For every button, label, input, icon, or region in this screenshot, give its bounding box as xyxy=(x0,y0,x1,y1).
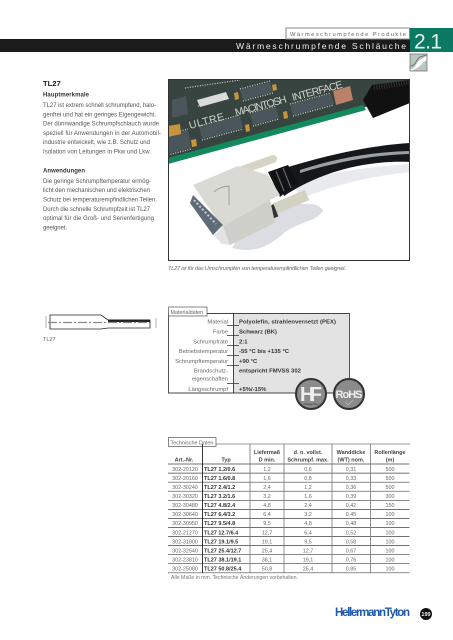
row 12 xyxy=(172,566,394,572)
product photo xyxy=(168,79,410,261)
row 3: 0,36 xyxy=(346,485,356,491)
row 10: 25,4 xyxy=(262,548,272,554)
row 2: 0,33 xyxy=(346,476,356,482)
row 5: 0,42 xyxy=(346,503,356,509)
shrink tube diagram xyxy=(46,315,156,329)
panel: Materialdaten: +5%/-15% xyxy=(239,387,267,393)
row 6: 302-30640 xyxy=(172,512,198,518)
row 11: 302-23810 xyxy=(172,557,198,563)
row 7: 302-30950 xyxy=(172,521,198,527)
row 2 xyxy=(172,476,394,482)
column headers: d. n. vollst. xyxy=(294,450,323,456)
column headers: (WT) nom. xyxy=(338,458,365,464)
row 5 xyxy=(172,503,394,509)
panel: Materialdaten: Brandschutz- xyxy=(194,369,228,375)
row 1: 302-20120 xyxy=(172,467,198,473)
row 10: 100 xyxy=(386,548,394,554)
text block: Hauptmerkmale: industrie entwickelt, wie z.B. Schutz und xyxy=(43,140,150,146)
row 4 xyxy=(172,494,394,500)
row 11: TL27 38.1/19.1 xyxy=(204,557,241,563)
row 2: 1,6 xyxy=(263,476,271,482)
row 11 xyxy=(172,557,394,563)
text block: Hauptmerkmale: TL27 ist extrem schnell schrumpfend, halo- xyxy=(43,103,156,109)
row 1 xyxy=(172,467,394,473)
row 7: 9,5 xyxy=(263,521,271,527)
row 9: TL27 19.1/9.5 xyxy=(204,539,238,545)
row 8: 6,4 xyxy=(304,530,312,536)
row 6: 3,2 xyxy=(304,512,312,518)
row 12: TL27 50.8/25.4 xyxy=(204,566,242,572)
logo: HellermannTyton: HellermannTyton xyxy=(335,607,410,619)
panel: Materialdaten: entspricht FMVSS 302 xyxy=(239,369,302,375)
product heading: TL27 xyxy=(43,79,61,88)
tab label: Materialdaten xyxy=(170,310,203,316)
row 5: 2,4 xyxy=(304,503,312,509)
panel: Materialdaten: Material xyxy=(207,320,228,326)
row 1: 1,2 xyxy=(263,467,271,473)
photo caption: TL27 ist für das Umschrumpfen von temperaturempfindlichen Teilen geeignet. xyxy=(168,266,346,272)
row 3: 2,4 xyxy=(263,485,271,491)
panel: Materialdaten: eigenschaften xyxy=(192,376,228,382)
text block: Hauptmerkmale: Hauptmerkmale xyxy=(43,92,90,98)
row 2: 0,8 xyxy=(304,476,312,482)
table footnote: Alle Maße in mm. Technische Änderungen vorbehalten. xyxy=(171,574,298,581)
row 5: 302-30480 xyxy=(172,503,198,509)
column headers: Liefermaß xyxy=(254,450,281,456)
text block: Anwendungen: licht den mechanischen und elektrischen xyxy=(43,188,150,194)
row 8 xyxy=(172,530,394,536)
text block: Hauptmerkmale: genfrei und hat ein geringes Eigengewicht. xyxy=(43,112,156,118)
metal plug xyxy=(190,195,223,235)
row 6: 0,45 xyxy=(346,512,356,518)
technical data table xyxy=(168,438,410,573)
row 12: 100 xyxy=(386,566,394,572)
row 2: TL27 1.6/0.8 xyxy=(204,476,235,482)
text block: Hauptmerkmale: Der dünnwandige Schrumpfschlauch wurde xyxy=(43,122,160,128)
column headers: Typ xyxy=(221,458,231,464)
row 6 xyxy=(172,512,394,518)
text block: Anwendungen: optimal für die Groß- und Serienfertigung xyxy=(43,216,154,222)
row 4: TL27 3.2/1.6 xyxy=(204,494,235,500)
panel: Materialdaten xyxy=(168,307,350,393)
icon: shrink tube xyxy=(410,54,427,71)
strain relief xyxy=(268,165,298,197)
header band xyxy=(0,28,410,52)
row 6: 100 xyxy=(386,512,394,518)
row 6: TL27 6.4/3.2 xyxy=(204,512,235,518)
row 9: 100 xyxy=(386,539,394,545)
board lettering: ULTRE xyxy=(188,111,226,132)
circuit board xyxy=(168,79,410,164)
row 10: 302-32540 xyxy=(172,548,198,554)
text block: Anwendungen xyxy=(43,168,157,231)
badge: halogen free xyxy=(296,379,337,409)
panel: Materialdaten: -55 °C bis +135 °C xyxy=(239,349,290,355)
row 10: 0,67 xyxy=(346,548,356,554)
row 3 xyxy=(172,485,394,491)
row 12: 50,8 xyxy=(262,566,272,572)
row 11: 19,1 xyxy=(303,557,313,563)
row 3: 1,2 xyxy=(304,485,312,491)
text block: Hauptmerkmale: speziell für Anwendungen in der Automobil- xyxy=(43,131,161,137)
badge: halogen free: halogenfrei xyxy=(304,402,319,406)
row 5: TL27 4.8/2.4 xyxy=(204,503,236,509)
row 8: 100 xyxy=(386,530,394,536)
row 7: 100 xyxy=(386,521,394,527)
header subtitle: Wärmeschrumpfende Produkte xyxy=(290,32,406,38)
row 4: 300 xyxy=(386,494,394,500)
row 12: 0,85 xyxy=(346,566,356,572)
circuit board: MACINTOSH xyxy=(234,94,288,119)
connector shadow xyxy=(232,204,323,250)
row 8: 0,52 xyxy=(346,530,356,536)
column headers: D min. xyxy=(259,458,276,464)
panel: Materialdaten: +90 °C xyxy=(239,359,258,365)
section number tab: 2.1 xyxy=(414,30,442,54)
row 10: TL27 25.4/12.7 xyxy=(204,548,241,554)
row 7: 4,8 xyxy=(304,521,312,527)
tab label: Technische Daten xyxy=(170,440,213,446)
row 2: 500 xyxy=(386,476,394,482)
row 7: 0,48 xyxy=(346,521,356,527)
row 2: 302-20160 xyxy=(172,476,198,482)
header title: Wärmeschrumpfende Schläuche xyxy=(236,41,406,51)
row 4: 1,6 xyxy=(304,494,312,500)
panel: Materialdaten: Farbe xyxy=(213,330,228,336)
row 9: 19,1 xyxy=(262,539,272,545)
column headers: Wanddicke xyxy=(337,450,365,456)
text block: Anwendungen: geeignet. xyxy=(43,225,67,231)
circuit board: INTERFACE xyxy=(291,79,344,104)
text block: Hauptmerkmale xyxy=(43,92,161,155)
row 5: 150 xyxy=(386,503,394,509)
column headers: Art.-Nr. xyxy=(175,458,194,464)
row 3: 500 xyxy=(386,485,394,491)
row 10: 12,7 xyxy=(303,548,313,554)
column headers xyxy=(175,450,406,464)
row 4: 3,2 xyxy=(263,494,271,500)
thumb screws xyxy=(242,159,273,170)
row 11: 0,76 xyxy=(346,557,356,563)
row 7 xyxy=(172,521,394,527)
diagram label: TL27 xyxy=(43,337,56,343)
row 9: 9,5 xyxy=(304,539,312,545)
panel: Materialdaten: Längsschrumpf xyxy=(188,387,228,393)
row 12: 25,4 xyxy=(303,566,313,572)
row 1: 0,31 xyxy=(346,467,356,473)
row 1: 0,6 xyxy=(304,467,312,473)
connector body xyxy=(193,166,280,245)
row 1: TL27 1.2/0.6 xyxy=(204,467,235,473)
row 8: TL27 12.7/6.4 xyxy=(204,530,239,536)
tab label xyxy=(168,438,216,446)
text block: Anwendungen: Durch die schnelle Schrumpfzeit ist TL27 xyxy=(43,207,151,213)
panel: Materialdaten: Schrumpftemperatur xyxy=(175,359,228,365)
panel: Materialdaten: 2:1 xyxy=(239,339,248,345)
badge: RoHS xyxy=(334,379,364,409)
row 11: 100 xyxy=(386,557,394,563)
row 7: TL27 9.5/4.8 xyxy=(204,521,235,527)
badge: halogen free: HF xyxy=(300,384,322,406)
frame xyxy=(168,80,410,260)
section number tab xyxy=(410,28,453,54)
tab label xyxy=(168,307,207,316)
row 9 xyxy=(172,539,394,545)
row 10 xyxy=(172,548,394,554)
row 3: TL27 2.4/1.2 xyxy=(204,485,235,491)
page number xyxy=(420,608,432,620)
row 5: 4,8 xyxy=(263,503,271,509)
row 3: 302-30240 xyxy=(172,485,198,491)
panel: Materialdaten: Betriebstemperatur xyxy=(179,349,228,355)
panel: Materialdaten: Schwarz (BK) xyxy=(239,330,277,336)
badge: RoHS: RoHS xyxy=(336,389,362,401)
row 1: 500 xyxy=(386,467,394,473)
black cable xyxy=(272,143,410,196)
text block: Hauptmerkmale: Isolation von Leitungen in Pkw und Lkw. xyxy=(43,149,151,155)
row 8: 302-21270 xyxy=(172,530,198,536)
row 4: 302-30320 xyxy=(172,494,198,500)
page number: 199 xyxy=(421,612,431,618)
text block: Anwendungen: Schutz bei temperaturempfindlichen Teilen. xyxy=(43,198,157,204)
row 6: 6,4 xyxy=(263,512,271,518)
row 11: 38,1 xyxy=(262,557,272,563)
text block: Anwendungen: Anwendungen xyxy=(43,168,85,174)
panel: Materialdaten: Schrumpfrate xyxy=(193,339,228,345)
text block: Anwendungen: Die geringe Schrumpftemperatur ermög- xyxy=(43,179,151,185)
row 8: 12,7 xyxy=(262,530,272,536)
panel: Materialdaten: Polyolefin, strahlenvernetzt (PEX) xyxy=(239,320,336,326)
column headers: Schrumpf. max. xyxy=(287,458,329,464)
column headers: Rollenlänge xyxy=(374,450,406,456)
row 4: 0,39 xyxy=(346,494,356,500)
row 12: 302-25080 xyxy=(172,566,198,572)
column headers: (m) xyxy=(386,458,394,464)
row 9: 302-31900 xyxy=(172,539,198,545)
row 9: 0,58 xyxy=(346,539,356,545)
